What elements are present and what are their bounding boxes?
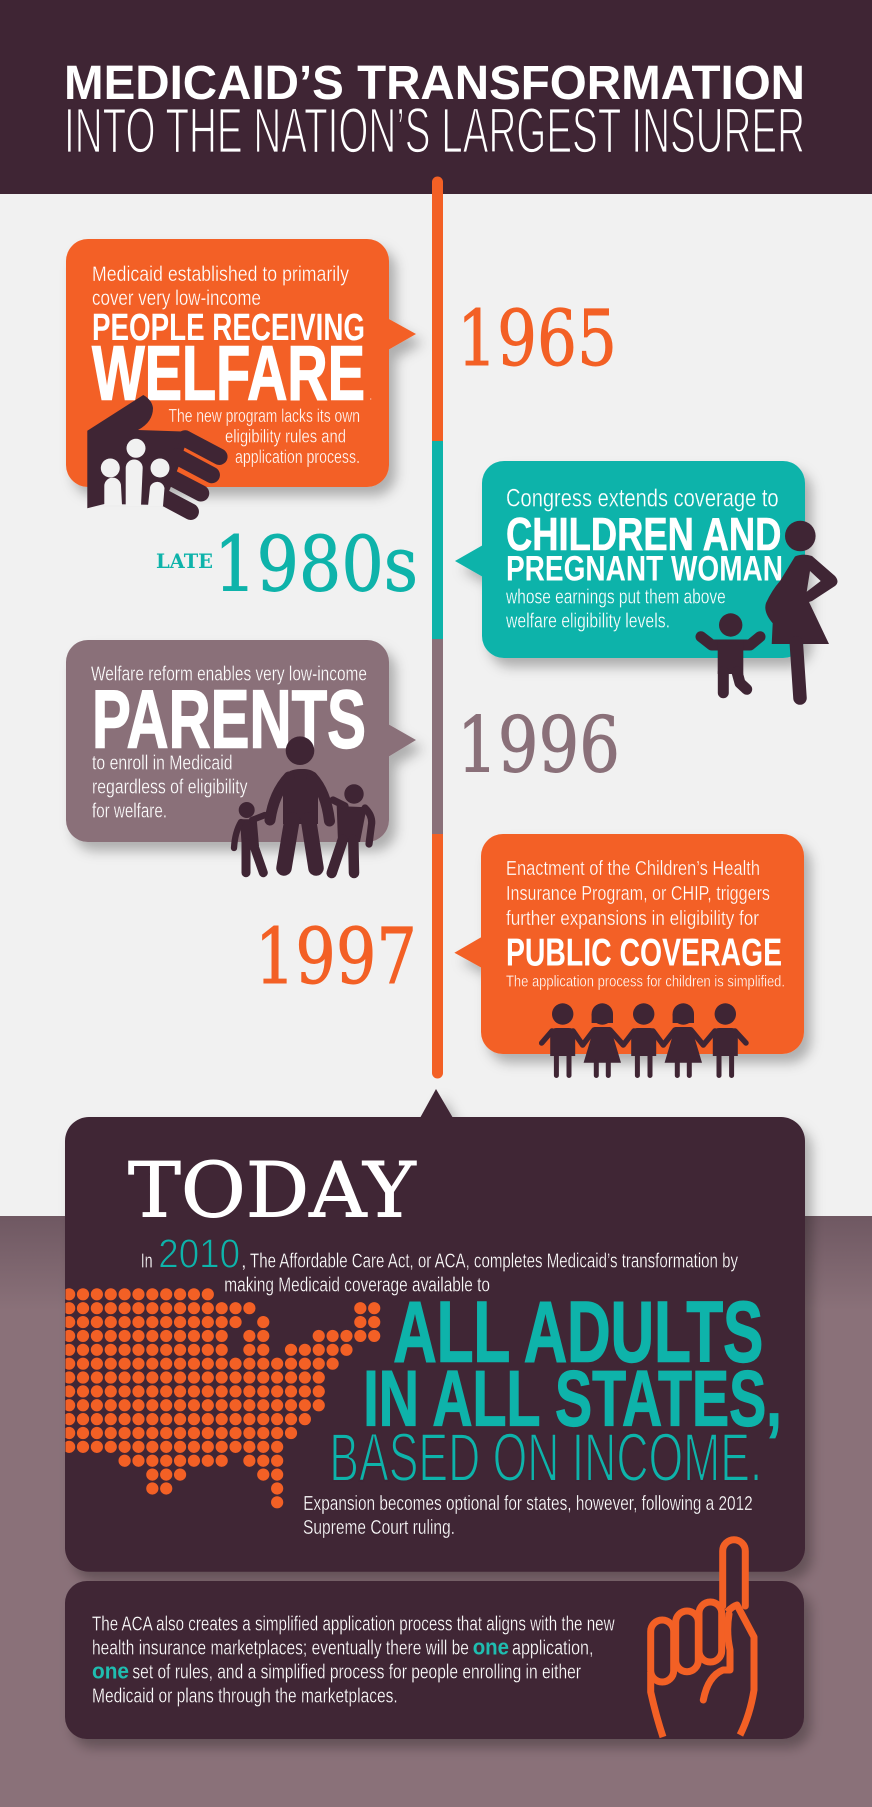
panel: today — [65, 1089, 805, 1572]
intro text: making Medicaid coverage available to — [224, 1275, 490, 1297]
year: 1996: 1996 — [457, 702, 620, 791]
icon: five children holding hands — [542, 1003, 746, 1076]
panel: 1997 CHIP — [454, 834, 804, 1076]
panel text — [92, 1614, 615, 1708]
panel shape with pointer — [65, 1089, 805, 1572]
panel text: Insurance Program, or CHIP, triggers — [506, 883, 770, 905]
icon: hand pointing one finger — [651, 1540, 754, 1737]
panel text: application, — [512, 1638, 594, 1660]
heading: parents: PARENTS — [92, 672, 366, 765]
panel text: eligibility rules and — [225, 426, 346, 446]
callout shape — [454, 834, 804, 1054]
panel text — [506, 858, 785, 991]
year: 1997: 1997 — [255, 913, 417, 1002]
panel text: Welfare reform enables very low-income — [91, 664, 367, 686]
callout shape — [66, 239, 416, 487]
panel text: further expansions in eligibility for — [506, 908, 759, 930]
panel: late 1980s children and pregnant women — [455, 461, 838, 698]
panel text — [92, 263, 360, 467]
panel text: to enroll in Medicaid — [92, 751, 232, 774]
panel text — [91, 664, 367, 822]
heading: pregnant woman: PREGNANT WOMAN — [506, 550, 783, 589]
panel text: for welfare. — [92, 799, 167, 822]
panel text — [505, 485, 779, 633]
icon: parent with two children — [234, 736, 372, 873]
panel text: The new program lacks its own — [168, 406, 360, 426]
callout shape — [455, 461, 805, 658]
period: . — [370, 392, 372, 402]
panel text: Enactment of the Children’s Health — [506, 858, 760, 880]
heading: children and: CHILDREN AND — [506, 508, 781, 560]
title line 1: MEDICAID’S TRANSFORMATION — [64, 57, 805, 110]
year: 2010: 2010 — [158, 1230, 240, 1276]
year: 1980s: 1980s — [214, 520, 418, 609]
background: mauve section — [0, 1216, 872, 1807]
panel text: The ACA also creates a simplified application process that aligns with the new — [92, 1614, 615, 1636]
heading: today: TODAY — [128, 1146, 416, 1235]
icon: pregnant woman and child — [701, 521, 838, 698]
intro text — [141, 1250, 738, 1297]
panel text: welfare eligibility levels. — [505, 611, 670, 633]
label: late: LATE — [156, 549, 213, 573]
panel text: cover very low-income — [92, 287, 261, 310]
emphasis: one: one — [473, 1635, 509, 1660]
expansion note — [303, 1493, 753, 1539]
panel text: Congress extends coverage to — [506, 485, 779, 513]
expansion note: Expansion becomes optional for states, however, following a 2012 — [303, 1493, 753, 1515]
icon: hand holding family — [87, 395, 219, 512]
panel text: regardless of eligibility — [92, 775, 248, 798]
year: 1965: 1965 — [457, 295, 617, 384]
panel text: health insurance marketplaces; eventually there will be — [92, 1638, 469, 1660]
dot map of the United States — [69, 1294, 374, 1502]
background: light section — [0, 194, 872, 1216]
panel: 1996 parents — [66, 640, 416, 873]
panel shape — [65, 1581, 804, 1739]
emphasis: one: one — [92, 1659, 129, 1684]
heading: people receiving: PEOPLE RECEIVING — [92, 307, 365, 349]
panel text: The application process for children is simplified. — [506, 974, 785, 991]
expansion note: Supreme Court ruling. — [303, 1517, 455, 1539]
panel text: application process. — [235, 447, 360, 467]
panel: 1965 welfare — [66, 239, 416, 512]
heading: welfare: WELFARE — [92, 330, 365, 416]
intro text: , — [241, 1250, 247, 1272]
panel text: Medicaid established to primarily — [92, 263, 349, 286]
panel: simplified application — [65, 1581, 804, 1739]
panel text: set of rules, and a simplified process for people enrolling in either — [132, 1662, 581, 1684]
intro text: In — [141, 1250, 153, 1272]
header band — [0, 0, 872, 194]
callout shape — [66, 640, 416, 842]
panel text: Medicaid or plans through the marketplaces. — [92, 1686, 398, 1708]
timeline — [432, 177, 443, 1079]
panel text: whose earnings put them above — [505, 586, 726, 608]
